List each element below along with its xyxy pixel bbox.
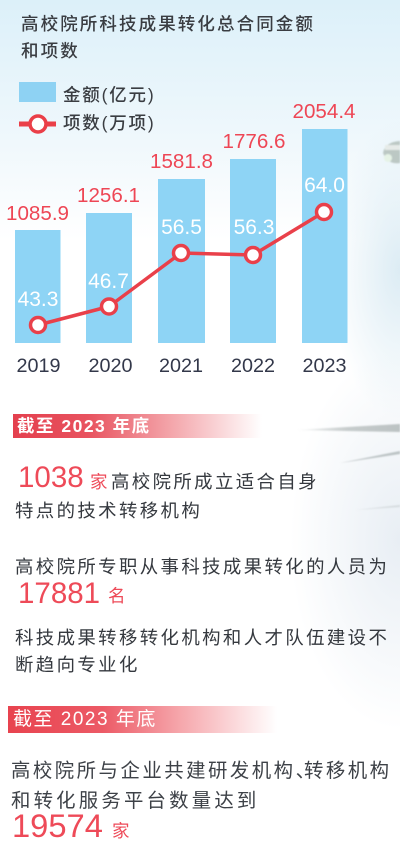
text line: 科技成果转移转化机构和人才队伍建设不 bbox=[15, 627, 389, 648]
number: 19574: 19574 bbox=[12, 807, 103, 844]
count values: 56.5 bbox=[161, 216, 202, 239]
text block: 19574 joint institutions bbox=[11, 760, 392, 844]
year axis labels: 2019 bbox=[16, 355, 61, 377]
count markers bbox=[30, 204, 332, 332]
unit: 名 bbox=[108, 586, 126, 606]
text block: 1038 institutions bbox=[15, 461, 319, 521]
text line: 高校院所专职从事科技成果转化的人员为 bbox=[15, 556, 389, 577]
text line: 断趋向专业化 bbox=[15, 654, 140, 675]
count line bbox=[38, 212, 324, 325]
amount values bbox=[6, 100, 356, 225]
title bbox=[21, 14, 315, 60]
year axis labels: 2022 bbox=[231, 355, 275, 377]
number: 17881: 17881 bbox=[18, 577, 100, 610]
title: 高校院所科技成果转化总合同金额 bbox=[21, 14, 315, 34]
unit: 家 bbox=[112, 821, 130, 841]
legend: amount label: 金额(亿元) bbox=[63, 85, 155, 105]
year axis labels: 2023 bbox=[302, 355, 347, 377]
amount values: 1085.9 bbox=[6, 202, 69, 225]
text block: 17881 staff bbox=[15, 556, 389, 610]
number: 1038: 1038 bbox=[18, 461, 84, 494]
amount values: 2054.4 bbox=[292, 100, 356, 123]
chart: bars and line by year bbox=[6, 100, 356, 377]
banner: as of end 2023 (first): 截至 2023 年底 bbox=[17, 416, 151, 436]
text line: 高校院所与企业共建研发机构、转移机构 bbox=[11, 760, 392, 782]
text line: 特点的技术转移机构 bbox=[15, 500, 202, 521]
legend: count line marker bbox=[19, 114, 56, 134]
text line: 和转化服务平台数量达到 bbox=[11, 790, 260, 812]
banner: as of end 2023 (second) bbox=[8, 706, 277, 733]
count values: 43.3 bbox=[18, 288, 58, 311]
banner: as of end 2023 (second): 截至 2023 年底 bbox=[13, 709, 157, 730]
year axis labels: 2021 bbox=[159, 355, 203, 377]
year axis labels: 2020 bbox=[88, 355, 133, 377]
amount values: 1581.8 bbox=[150, 150, 213, 173]
unit: 家 bbox=[90, 472, 108, 492]
text block: professionalization bbox=[15, 627, 389, 675]
legend: count label: 项数(万项) bbox=[63, 113, 155, 133]
text line: 高校院所成立适合自身 bbox=[111, 471, 319, 492]
amount values: 1776.6 bbox=[222, 130, 286, 153]
count values: 56.3 bbox=[234, 216, 274, 239]
banner: as of end 2023 (first) bbox=[13, 414, 262, 438]
bars bbox=[15, 129, 348, 343]
year axis labels bbox=[16, 355, 347, 377]
legend bbox=[19, 82, 155, 134]
count values: 64.0 bbox=[304, 174, 345, 197]
legend: amount swatch bbox=[19, 82, 56, 102]
title: 和项数 bbox=[21, 40, 80, 60]
amount values: 1256.1 bbox=[77, 184, 140, 207]
count values: 46.7 bbox=[88, 270, 129, 293]
count values bbox=[18, 174, 345, 311]
